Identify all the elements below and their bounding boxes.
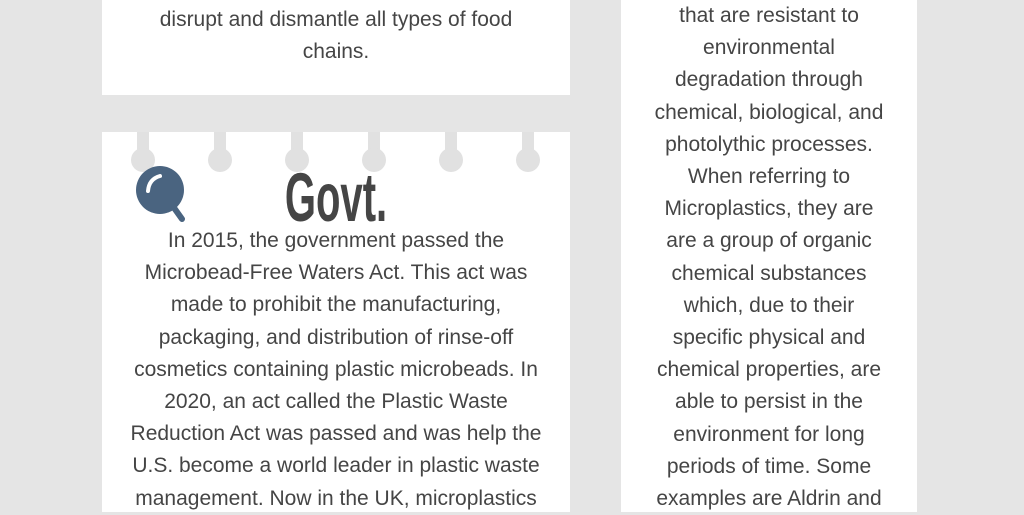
text: govt body: Microbead-Free Waters Act. This act was <box>145 261 527 284</box>
panel: right card <box>621 0 917 512</box>
text: govt body: In 2015, the government passed the <box>168 229 504 252</box>
heading: Govt.: Govt. <box>285 159 387 236</box>
text: persistent organic pollutants: environmental <box>703 36 835 59</box>
text: food chains: disrupt and dismantle all types of food <box>160 8 512 31</box>
text: govt body: packaging, and distribution of rinse-off <box>159 326 513 349</box>
text: persistent organic pollutants: are a group of organic <box>666 229 872 252</box>
text: govt body: cosmetics containing plastic microbeads. In <box>134 358 538 381</box>
text: persistent organic pollutants: chemical, biological, and <box>655 101 883 124</box>
text: govt body: made to prohibit the manufacturing, <box>171 293 501 316</box>
text: persistent organic pollutants <box>655 4 883 510</box>
text: govt body: U.S. become a world leader in plastic waste <box>132 454 540 477</box>
notebook rings <box>131 132 540 172</box>
text: persistent organic pollutants: that are resistant to <box>679 4 859 27</box>
text: food chains: chains. <box>303 40 369 63</box>
icon: magnifier <box>136 166 185 222</box>
text: govt body: 2020, an act called the Plastic Waste <box>164 390 508 413</box>
panel: govt notebook card <box>102 132 570 512</box>
text: persistent organic pollutants: specific physical and <box>673 326 865 349</box>
text: persistent organic pollutants: periods of time. Some <box>667 455 871 478</box>
text: persistent organic pollutants: chemical substances <box>672 262 866 285</box>
text: persistent organic pollutants: able to persist in the <box>675 390 863 413</box>
text: persistent organic pollutants: environment for long <box>673 423 865 446</box>
text: govt body: management. Now in the UK, microplastics <box>135 487 537 510</box>
text: persistent organic pollutants: chemical properties, are <box>657 358 881 381</box>
text: govt body: Reduction Act was passed and was help the <box>131 422 541 445</box>
text: persistent organic pollutants: degradation through <box>675 68 863 91</box>
text: persistent organic pollutants: which, due to their <box>684 294 854 317</box>
text: persistent organic pollutants: photolythic processes. <box>665 133 873 156</box>
text: persistent organic pollutants: When referring to <box>688 165 850 188</box>
text: food chains <box>160 8 512 63</box>
text: persistent organic pollutants: examples are Aldrin and <box>656 487 882 510</box>
text: persistent organic pollutants: Microplastics, they are <box>665 197 873 220</box>
panel: top-left card <box>102 0 570 95</box>
text: govt body <box>131 229 541 510</box>
